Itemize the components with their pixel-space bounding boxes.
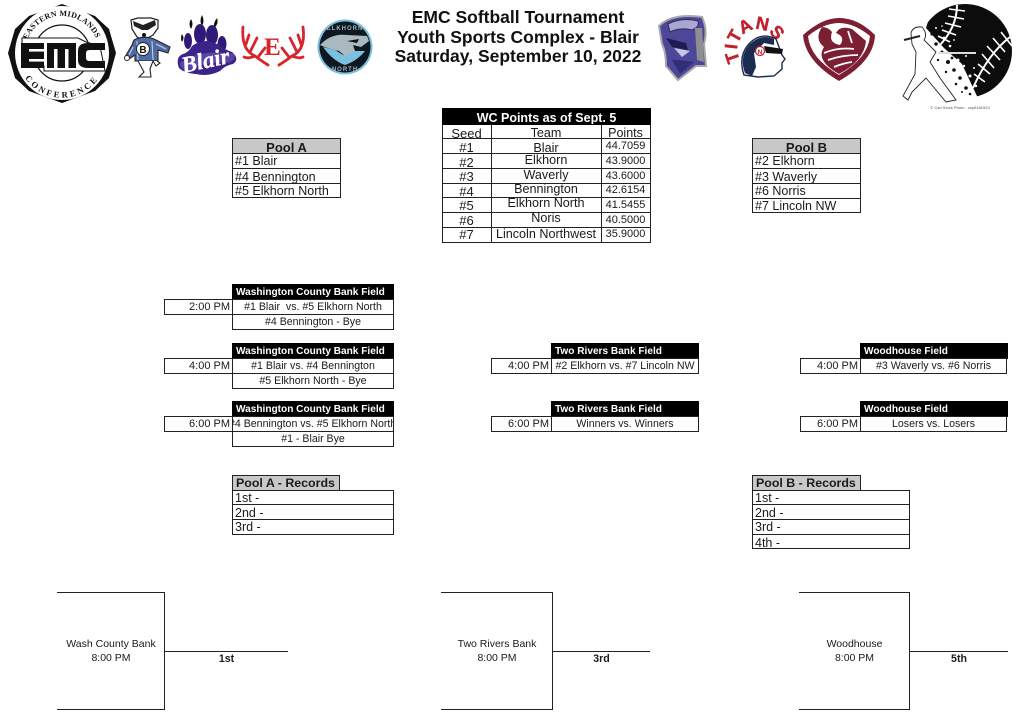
seed column: #1 bbox=[459, 140, 474, 155]
icon: Norris shield bbox=[803, 18, 875, 81]
icon: Elkhorn antlers: E bbox=[264, 34, 281, 61]
bracket: Wash County Bank final: 1st bbox=[219, 653, 234, 665]
bracket: Woodhouse final: 5th bbox=[951, 653, 967, 665]
game block: Woodhouse 6:00 PM bbox=[800, 401, 1008, 432]
game block: Washington County 4:00 PM: Washington County Bank Field bbox=[236, 346, 385, 357]
game block: Washington County 2:00 PM: Washington County Bank Field bbox=[236, 287, 385, 298]
pool heading bbox=[752, 138, 861, 154]
game block: Woodhouse 6:00 PM: Losers vs. Losers bbox=[892, 418, 975, 430]
game block: Woodhouse 6:00 PM: Woodhouse Field bbox=[864, 404, 948, 415]
game block: Washington County 4:00 PM: #1 Blair vs. #4 Bennington bbox=[251, 360, 375, 372]
icon: Titans helmet: N bbox=[758, 49, 763, 56]
team column: Blair bbox=[533, 141, 559, 155]
bracket: Wash County Bank final: 8:00 PM bbox=[91, 652, 131, 664]
icon: Elkhorn North wolf: ELKHORN bbox=[327, 26, 363, 32]
icon: Bennington badger: B bbox=[139, 45, 147, 56]
panel: Pool A records bbox=[232, 475, 394, 535]
bracket: Two Rivers Bank final: 3rd bbox=[593, 653, 610, 665]
panel: Pool B: #3 Waverly bbox=[755, 170, 817, 184]
game block: Woodhouse 6:00 PM: 6:00 PM bbox=[817, 418, 858, 430]
icon: softball batter bbox=[902, 4, 1012, 110]
icon: Blair paw: Blair bbox=[178, 43, 233, 78]
game block: Two Rivers 4:00 PM: Two Rivers Bank Field bbox=[555, 346, 662, 357]
game block: Washington County 2:00 PM: 2:00 PM bbox=[189, 301, 230, 313]
panel: Pool B bbox=[752, 138, 861, 213]
bracket: Two Rivers Bank final bbox=[441, 592, 650, 710]
game block: Washington County 6:00 PM: Washington County Bank Field bbox=[236, 404, 385, 415]
panel: Pool B records: 3rd - bbox=[755, 520, 781, 534]
seed column: #6 bbox=[459, 213, 474, 228]
team column: Waverly bbox=[523, 168, 568, 182]
game block: Woodhouse 4:00 PM bbox=[800, 343, 1008, 374]
game block: Woodhouse 4:00 PM: 4:00 PM bbox=[817, 360, 858, 372]
game block: Two Rivers 6:00 PM: 6:00 PM bbox=[508, 418, 549, 430]
points column: 42.6154 bbox=[606, 184, 645, 196]
table heading bbox=[442, 108, 651, 125]
team column: Team bbox=[531, 126, 561, 140]
team column: Elkhorn bbox=[525, 153, 567, 167]
icon: Elkhorn North wolf: NORTH bbox=[332, 67, 358, 73]
records heading: Pool A - Records bbox=[236, 476, 335, 490]
game block: Washington County 2:00 PM: #1 Blair vs. #5 Elkhorn North bbox=[244, 301, 382, 313]
bracket: Woodhouse final bbox=[799, 592, 1008, 710]
panel: Pool A records: 2nd - bbox=[235, 506, 264, 520]
icon: Titans helmet: TITANS bbox=[724, 16, 784, 65]
icon: EMC conference logo: EASTERN MIDLANDS bbox=[22, 10, 100, 38]
bracket: Woodhouse final: 8:00 PM bbox=[835, 652, 874, 664]
game block: Washington County 4:00 PM bbox=[164, 343, 394, 389]
icon: Bennington badger bbox=[124, 17, 171, 78]
panel: Pool A bbox=[232, 138, 341, 198]
panel: Pool A: #4 Bennington bbox=[235, 170, 316, 184]
records heading: Pool B - Records bbox=[756, 476, 856, 490]
table heading: WC Points as of Sept. 5 bbox=[477, 111, 616, 125]
game block: Washington County 6:00 PM bbox=[164, 401, 394, 447]
game block: Washington County 4:00 PM: 4:00 PM bbox=[189, 360, 230, 372]
panel: WC points table bbox=[442, 108, 651, 243]
panel: Pool B: #6 Norris bbox=[755, 184, 806, 198]
panel: Pool B records: 2nd - bbox=[755, 506, 784, 520]
icon: EMC conference logo bbox=[8, 4, 116, 103]
game block: Two Rivers 4:00 PM: #2 Elkhorn vs. #7 Lincoln NW bbox=[556, 360, 694, 372]
points column: 43.9000 bbox=[606, 155, 645, 167]
title bbox=[395, 7, 641, 66]
game block: Two Rivers 4:00 PM bbox=[491, 343, 699, 374]
title: Youth Sports Complex - Blair bbox=[397, 26, 639, 46]
panel: Pool A: #5 Elkhorn North bbox=[235, 184, 329, 198]
team column bbox=[496, 126, 596, 241]
game block: Washington County 2:00 PM bbox=[164, 284, 394, 330]
points column: 40.5000 bbox=[606, 214, 645, 226]
panel: Pool B: #2 Elkhorn bbox=[755, 154, 815, 168]
icon: Elkhorn antlers bbox=[241, 26, 305, 66]
game block: Two Rivers 4:00 PM: 4:00 PM bbox=[508, 360, 549, 372]
team column: Elkhorn North bbox=[508, 196, 584, 210]
game block: Washington County 4:00 PM: #5 Elkhorn North - Bye bbox=[259, 375, 367, 387]
team column: Noris bbox=[531, 211, 561, 225]
team column: Lincoln Northwest bbox=[496, 227, 596, 241]
game block: Washington County 6:00 PM: 6:00 PM bbox=[189, 418, 230, 430]
bracket: Wash County Bank final bbox=[57, 592, 288, 710]
game block: Washington County 6:00 PM: #1 - Blair Bye bbox=[281, 433, 345, 445]
panel: Pool A records: 1st - bbox=[235, 491, 259, 505]
panel: Pool A: #1 Blair bbox=[235, 154, 277, 168]
seed column: #2 bbox=[459, 155, 474, 170]
seed column: #7 bbox=[459, 227, 474, 242]
points column bbox=[606, 126, 646, 240]
icon: softball batter: © Can Stock Photo - csp6181524 bbox=[930, 105, 990, 110]
points column: 44.7059 bbox=[606, 140, 645, 152]
seed column: #3 bbox=[459, 169, 474, 184]
game block: Woodhouse 4:00 PM: #3 Waverly vs. #6 Norris bbox=[876, 360, 991, 372]
game block: Two Rivers 6:00 PM: Two Rivers Bank Field bbox=[555, 404, 662, 415]
icon: EMC conference logo: CONFERENCE bbox=[26, 76, 97, 98]
icon: Elkhorn North wolf bbox=[318, 20, 372, 74]
panel: Pool B records: 1st - bbox=[755, 491, 779, 505]
icon: Waverly viking bbox=[658, 15, 708, 82]
seed column: Seed bbox=[451, 126, 482, 141]
game block: Two Rivers 6:00 PM: Winners vs. Winners bbox=[576, 418, 674, 430]
panel: Pool A records: 3rd - bbox=[235, 520, 261, 534]
panel: Pool B records bbox=[752, 475, 910, 549]
points column: 35.9000 bbox=[606, 228, 645, 240]
bracket: Two Rivers Bank final: 8:00 PM bbox=[477, 652, 517, 664]
pool heading bbox=[232, 138, 341, 154]
seed column bbox=[451, 126, 482, 242]
points column: 41.5455 bbox=[606, 199, 645, 211]
bracket: Woodhouse final: Woodhouse bbox=[827, 638, 882, 650]
game block: Two Rivers 6:00 PM bbox=[491, 401, 699, 432]
team column: Bennington bbox=[514, 182, 578, 196]
bracket: Wash County Bank final: Wash County Bank bbox=[66, 638, 156, 650]
points column: 43.6000 bbox=[606, 170, 645, 182]
icon: Blair paw bbox=[178, 15, 236, 78]
points column: Points bbox=[608, 126, 643, 140]
seed column: #5 bbox=[459, 198, 474, 213]
title: Saturday, September 10, 2022 bbox=[395, 46, 641, 66]
seed column: #4 bbox=[459, 184, 474, 199]
panel: Pool B: #7 Lincoln NW bbox=[755, 199, 836, 213]
bracket: Two Rivers Bank final: Two Rivers Bank bbox=[458, 638, 536, 650]
game block: Woodhouse 4:00 PM: Woodhouse Field bbox=[864, 346, 948, 357]
title: EMC Softball Tournament bbox=[412, 7, 624, 27]
game block: Washington County 2:00 PM: #4 Bennington - Bye bbox=[265, 316, 361, 328]
